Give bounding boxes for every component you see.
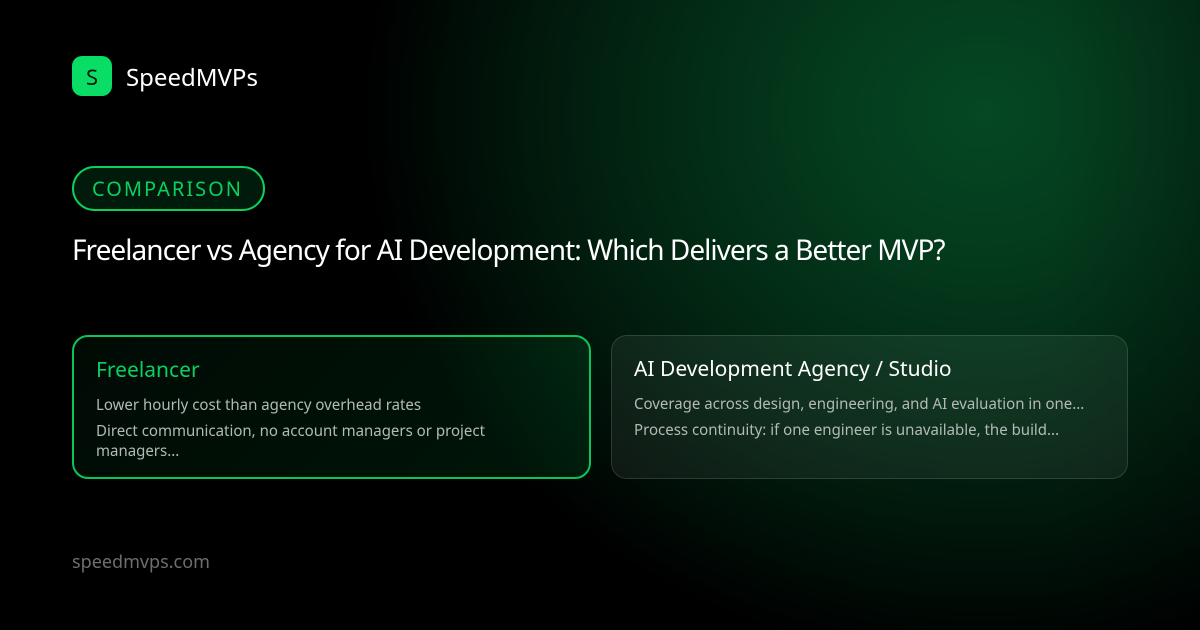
freelancer point 1: Lower hourly cost than agency overhead rates <box>96 395 421 415</box>
freelancer heading: Freelancer <box>96 356 200 384</box>
freelancer point 2: managers... <box>96 441 179 461</box>
category badge <box>72 166 265 211</box>
logo icon <box>72 56 112 96</box>
panel: freelancer <box>72 335 591 479</box>
title: Freelancer vs Agency for AI Development: Which Delivers a Better MVP? <box>72 231 945 269</box>
footer url: speedmvps.com <box>72 550 210 574</box>
agency point 1: Coverage across design, engineering, and AI evaluation in one... <box>634 394 1084 414</box>
panel: agency <box>611 335 1128 479</box>
freelancer point 2 <box>96 421 485 461</box>
category badge: COMPARISON <box>92 175 243 202</box>
freelancer point 2: Direct communication, no account managers or project <box>96 421 485 441</box>
logo icon: S <box>86 62 98 92</box>
agency heading: AI Development Agency / Studio <box>634 355 952 383</box>
brand name: SpeedMVPs <box>126 61 258 94</box>
agency point 2: Process continuity: if one engineer is unavailable, the build... <box>634 420 1059 440</box>
